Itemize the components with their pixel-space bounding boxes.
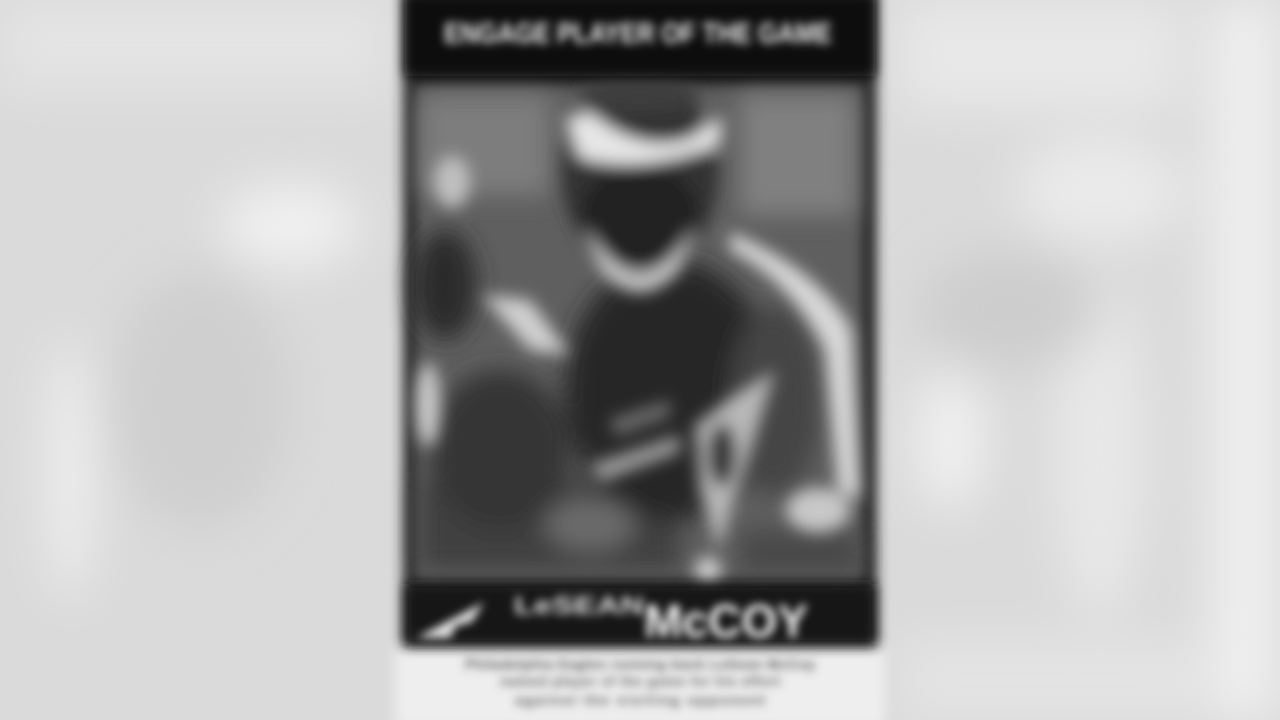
poster frame	[403, 0, 877, 646]
top banner	[405, 0, 875, 76]
caption panel below poster	[395, 648, 885, 720]
banner title: ENGAGE PLAYER OF THE GAME	[444, 18, 832, 50]
icon: eagle logo	[416, 602, 484, 638]
photo	[413, 77, 862, 583]
bottom name bar	[405, 584, 875, 647]
caption text: against the visiting opponent	[515, 692, 765, 708]
player first name: LeSEAN	[514, 592, 644, 620]
caption text: Philadelphia Eagles running back LeSean McCoy	[465, 656, 815, 672]
player last name: McCOY	[644, 595, 808, 647]
caption text	[465, 656, 815, 708]
caption text: named player of the game for his effort	[500, 673, 780, 689]
poster	[403, 0, 877, 647]
